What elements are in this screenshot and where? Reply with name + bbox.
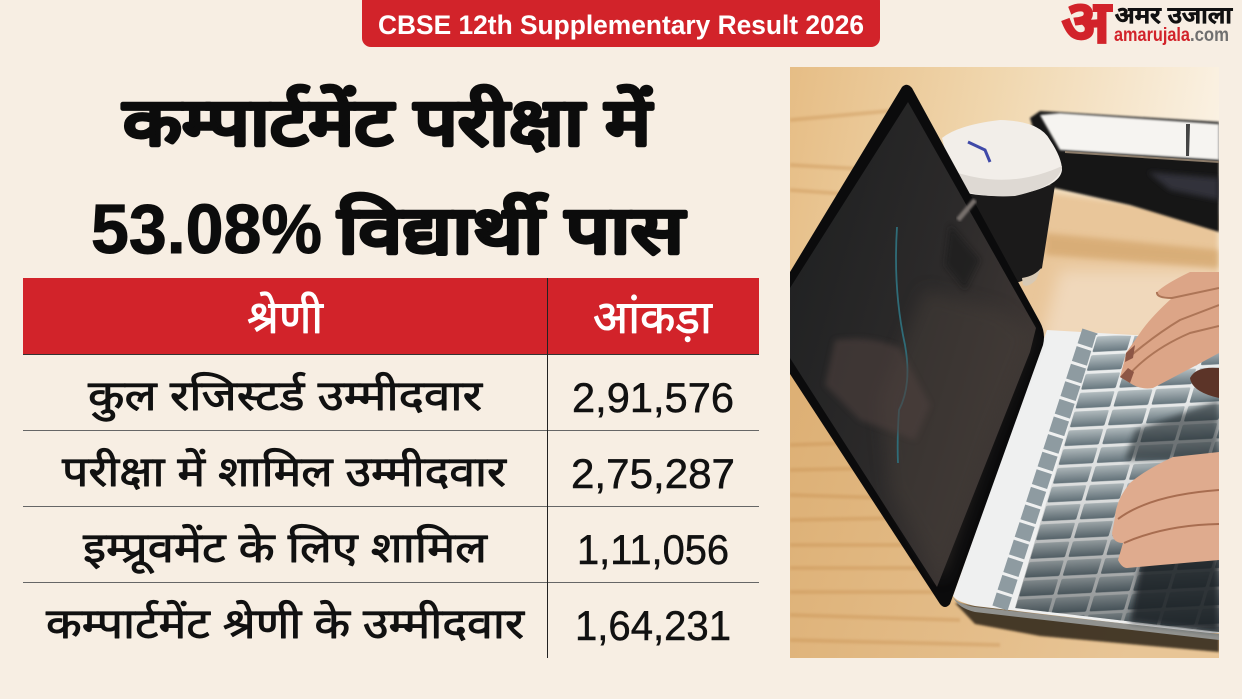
lower hand	[1112, 452, 1219, 568]
table row: total registered: कुल रजिस्टर्ड उम्मीदवार	[88, 372, 483, 422]
keyboard base	[953, 330, 1219, 640]
title	[91, 84, 687, 268]
table row: appeared: परीक्षा में शामिल उम्मीदवार	[62, 448, 507, 495]
laptop lid	[790, 85, 1044, 607]
top banner: CBSE 12th Supplementary Result 2026: CBSE 12th Supplementary Result 2026	[378, 10, 864, 40]
top banner: CBSE 12th Supplementary Result 2026	[362, 0, 880, 47]
logo: Amar Ujala: अमर उजाला	[1115, 2, 1233, 28]
table row: compartment	[46, 600, 731, 649]
table row: total registered: 2,91,576	[572, 374, 734, 421]
table	[23, 278, 759, 658]
table header row: श्रेणी	[247, 291, 324, 343]
table header row	[23, 278, 759, 354]
logo: Amar Ujala	[1062, 0, 1233, 55]
table row: compartment: कम्पार्टमेंट श्रेणी के उम्मीदवार	[46, 600, 525, 647]
keyboard keys	[1000, 331, 1219, 632]
logo: Amar Ujala: amarujala	[1114, 25, 1190, 46]
table row: appeared	[62, 448, 735, 497]
table header row: आंकड़ा	[593, 291, 713, 343]
photo: laptop on wooden desk	[790, 67, 1219, 658]
table row: improvement: 1,11,056	[577, 526, 729, 573]
table row: compartment: 1,64,231	[575, 602, 731, 649]
laptop screen	[790, 102, 1036, 587]
logo: Amar Ujala: .com	[1190, 25, 1229, 46]
phone and dark object behind cup	[1030, 111, 1219, 232]
wooden desk	[790, 67, 1219, 658]
title: 53.08%	[91, 190, 322, 268]
shadow under laptop	[955, 603, 1219, 652]
table row: appeared: 2,75,287	[571, 450, 735, 497]
title: विद्यार्थी पास	[336, 192, 687, 267]
table row: improvement: इम्प्रूवमेंट के लिए शामिल	[83, 524, 489, 574]
coffee cup	[942, 120, 1062, 286]
table row: total registered	[88, 372, 734, 422]
upper hand	[1120, 272, 1219, 398]
title: कम्पार्टमेंट परीक्षा में	[121, 84, 654, 159]
table row: improvement	[83, 524, 729, 574]
